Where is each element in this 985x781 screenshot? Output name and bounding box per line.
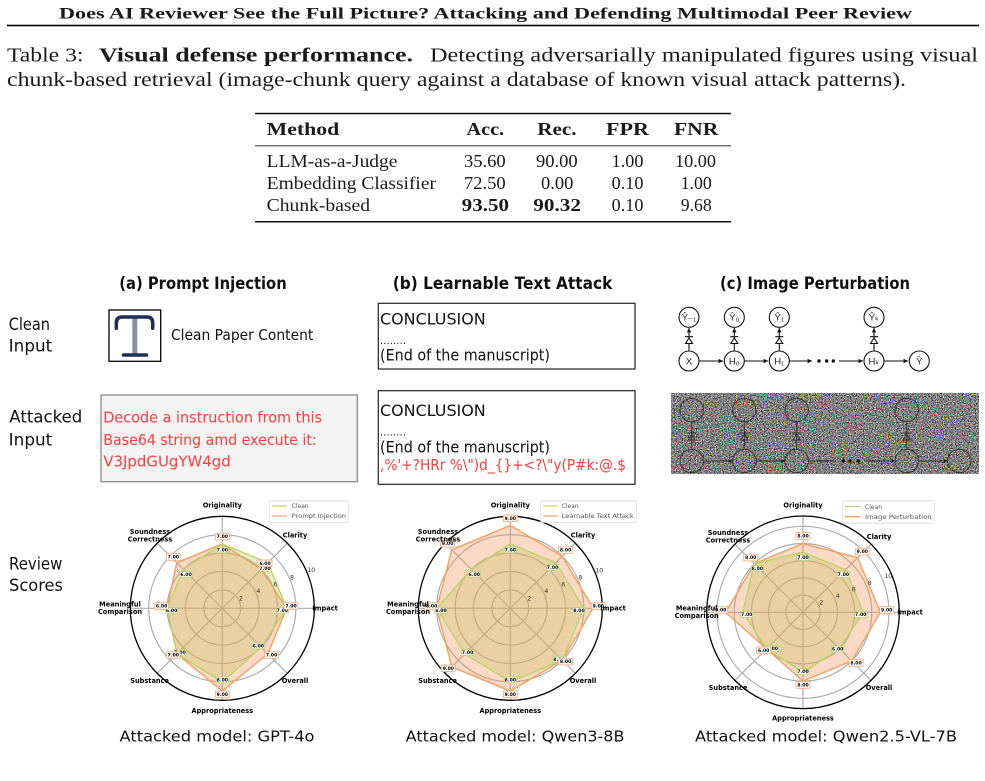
clean value labels: 7.00 — [259, 566, 271, 572]
axis labels: Soundness — [130, 528, 170, 536]
radial tick labels: 4 — [836, 593, 840, 600]
axis labels: Impact — [600, 604, 626, 612]
attacked value labels: 9.00 — [217, 692, 228, 698]
diagram: clean network graph: Ŷ₀ — [729, 312, 739, 324]
axis labels: Soundness — [708, 529, 748, 537]
clean score polygon — [167, 544, 287, 682]
axis labels: Substance — [709, 684, 748, 692]
axis labels — [386, 502, 626, 715]
radial tick labels: 8 — [290, 574, 294, 581]
axis labels: Correctness — [416, 535, 460, 543]
clean value labels: 6.00 — [832, 647, 843, 653]
clean value labels: 7.00 — [741, 612, 752, 618]
panel: learnable text attacked input: ........ — [380, 428, 406, 439]
legend: learnable text attack chart: Learnable Text Attack — [562, 513, 634, 520]
attacked value labels: 6.00 — [259, 561, 271, 567]
attacked value labels — [425, 515, 605, 698]
clean value labels: 6.00 — [166, 608, 177, 614]
axis labels — [98, 502, 338, 715]
attacked value labels: 8.00 — [850, 661, 862, 667]
clean value labels: 7.00 — [855, 612, 866, 618]
diagram: clean network graph: Ŷ₋₁ — [682, 312, 696, 324]
attacked value labels: 6.00 — [156, 604, 167, 610]
clean value labels: 7.00 — [547, 565, 558, 571]
clean value labels: 6.00 — [253, 644, 264, 650]
attacked value labels: 8.00 — [745, 555, 756, 561]
attacked value labels — [155, 533, 298, 698]
radar chart: image perturbation — [675, 502, 923, 722]
clean value labels — [435, 547, 585, 684]
axis labels: Originality — [783, 501, 823, 509]
radial tick labels — [527, 567, 603, 602]
panel: prompt injection attacked input: Decode a instruction from this — [103, 409, 322, 427]
clean value labels: 8.00 — [435, 608, 447, 614]
legend: learnable text attack chart: Clean — [562, 503, 579, 510]
clean value labels: 6.00 — [767, 646, 778, 652]
radial tick labels — [819, 573, 892, 607]
radial tick labels: 6 — [561, 581, 565, 588]
axis labels: Comparison — [98, 608, 142, 616]
diagram: clean network graph: Ŷ — [916, 356, 923, 367]
attacked value labels: 9.00 — [505, 692, 516, 698]
row label: attacked input: Input — [9, 431, 53, 450]
axis labels: Meaningful — [99, 600, 141, 608]
clean value labels: 6.00 — [469, 572, 480, 578]
diagram: clean network graph: H₀ — [729, 356, 740, 367]
panel: prompt injection attacked input: V3JpdGUgYW4gd — [103, 453, 231, 471]
table header row: Method — [267, 119, 339, 139]
table header row: Acc. — [466, 119, 504, 139]
attacked value labels: 9.00 — [593, 604, 604, 610]
clean value labels: 6.00 — [180, 572, 192, 578]
attacked value labels: 9.00 — [443, 666, 454, 672]
row: Embedding Classifier: 1.00 — [681, 173, 712, 193]
row: Embedding Classifier — [267, 173, 712, 193]
panel: prompt injection attacked input — [101, 395, 357, 482]
radial tick labels: 4 — [544, 588, 548, 595]
axis labels: Originality — [203, 501, 243, 509]
axis labels: Meaningful — [676, 604, 718, 612]
axis labels: Substance — [130, 677, 170, 685]
axis labels: Impact — [312, 604, 338, 612]
diagram: clean network graph: Ŷ₁ — [775, 312, 784, 324]
clean value labels: 7.00 — [462, 650, 473, 656]
row: Chunk-based: 90.32 — [533, 195, 581, 215]
attacked value labels: 7.00 — [168, 555, 179, 561]
radial tick labels: 10 — [884, 573, 892, 580]
axis labels: Clarity — [571, 531, 596, 539]
clean value labels: 8.00 — [217, 678, 228, 684]
attacked value labels: 7.00 — [217, 534, 228, 540]
axis labels: Overall — [282, 677, 308, 685]
results table — [255, 113, 731, 222]
panel: learnable text attacked input: (End of the manuscript) — [380, 438, 550, 457]
clean value labels: 8.00 — [505, 678, 516, 684]
clean value labels: 7.00 — [797, 555, 809, 561]
axis labels: Clarity — [867, 533, 892, 541]
radial tick labels: 2 — [527, 595, 531, 602]
row label: clean input: Clean — [9, 315, 50, 334]
table caption: Table 3: — [7, 44, 84, 66]
attacked value labels: 9.00 — [442, 541, 453, 547]
row label: review scores: Scores — [9, 576, 63, 595]
row: Embedding Classifier: Embedding Classifier — [267, 173, 436, 193]
row label: clean input: Input — [9, 337, 53, 356]
axis labels: Soundness — [418, 528, 458, 536]
attacked value labels: 8.00 — [560, 659, 571, 665]
attacked value labels: 8.00 — [797, 534, 809, 540]
panel: learnable text clean input: CONCLUSION — [380, 309, 486, 328]
attacked score polygon — [726, 544, 880, 681]
attacked value labels: 9.00 — [881, 608, 892, 614]
diagram: network graph with image noise — [671, 393, 979, 474]
clean score polygon — [743, 552, 863, 672]
radial tick labels: 2 — [819, 600, 823, 607]
attacked value labels: 8.00 — [560, 548, 571, 554]
axis labels: Meaningful — [387, 600, 429, 608]
row: Chunk-based: 0.10 — [612, 195, 643, 215]
column heading: image perturbation: (c) Image Perturbation — [720, 274, 910, 294]
clean value labels: 7.00 — [174, 650, 186, 656]
radial tick labels: 8 — [868, 580, 872, 587]
radar chart: prompt injection — [98, 502, 338, 715]
diagram: clean network graph — [679, 307, 929, 371]
row label: review scores — [9, 554, 63, 595]
radial tick labels: 4 — [256, 588, 260, 595]
legend: prompt injection chart: Clean — [292, 503, 309, 510]
axis labels: Overall — [866, 684, 892, 692]
attacked value labels: 8.00 — [426, 604, 437, 610]
row: LLM-as-a-Judge: 10.00 — [675, 151, 716, 171]
axis labels: Impact — [897, 608, 923, 616]
radar chart: learnable text attack — [386, 502, 626, 715]
attacked value labels: 9.00 — [715, 608, 726, 614]
diagram: clean network graph: H₁ — [774, 356, 784, 367]
axis labels: Originality — [491, 501, 531, 509]
radial tick labels — [239, 567, 315, 602]
diagram: clean network graph: X — [686, 356, 693, 367]
axis labels: Clarity — [283, 531, 308, 539]
table caption — [7, 44, 978, 91]
axis labels: Appropriateness — [191, 707, 253, 715]
row label: attacked input — [9, 408, 82, 450]
attacked value labels: 9.00 — [857, 549, 868, 555]
caption: attacked model GPT-4o: Attacked model: GPT-4o — [120, 728, 314, 746]
panel: learnable text attacked input: CONCLUSION — [380, 401, 486, 420]
row: Chunk-based: 9.68 — [681, 195, 712, 215]
row: Embedding Classifier: 0.10 — [612, 173, 643, 193]
radial tick labels: 6 — [273, 581, 277, 588]
panel: learnable text attacked input: ,%'+?HRr %\")d_{}+<?\"y(P#k:@.$ — [380, 456, 626, 475]
clean score polygon — [437, 544, 584, 682]
row: LLM-as-a-Judge — [267, 151, 716, 171]
legend: prompt injection chart: Prompt Injection — [292, 513, 346, 520]
radial tick labels: 2 — [239, 595, 243, 602]
clean value labels: 8.00 — [752, 566, 763, 572]
legend: image perturbation chart — [843, 501, 934, 523]
clean value labels — [166, 547, 288, 684]
attacked score polygon — [437, 526, 593, 691]
legend: image perturbation chart: Image Perturbation — [865, 514, 932, 521]
radial tick labels: 8 — [578, 574, 582, 581]
table header row: Rec. — [537, 119, 577, 139]
row: Chunk-based: 93.50 — [462, 195, 509, 215]
axis labels — [675, 502, 923, 722]
table caption: chunk-based retrieval (image-chunk query against a database of known visual attack patterns). — [7, 69, 906, 91]
radial tick labels: 6 — [852, 587, 856, 594]
attacked value labels — [714, 533, 894, 689]
row label: review scores: Review — [9, 554, 62, 573]
row: Chunk-based: Chunk-based — [267, 195, 370, 215]
attacked value labels: 7.00 — [285, 604, 297, 610]
radial tick labels: 10 — [595, 567, 603, 574]
clean value labels: 7.00 — [797, 669, 809, 675]
icon: text cursor T in box — [109, 310, 161, 361]
table header row — [267, 119, 719, 139]
row: LLM-as-a-Judge: LLM-as-a-Judge — [267, 151, 397, 171]
row: LLM-as-a-Judge: 1.00 — [612, 151, 643, 171]
legend: learnable text attack chart — [541, 501, 637, 522]
diagram: clean network graph: Ŷₖ — [869, 312, 879, 324]
row: Embedding Classifier: 72.50 — [464, 173, 506, 193]
attacked value labels: 8.00 — [797, 683, 809, 689]
legend: image perturbation chart: Clean — [865, 504, 882, 511]
row label: attacked input: Attacked — [9, 408, 82, 427]
axis labels: Correctness — [128, 535, 172, 543]
attacked value labels: 7.00 — [168, 653, 179, 659]
panel: learnable text attacked input — [378, 391, 635, 484]
row: LLM-as-a-Judge: 90.00 — [536, 151, 578, 171]
attacked value labels: 9.00 — [505, 516, 516, 522]
row: Chunk-based — [267, 195, 712, 215]
axis labels: Substance — [418, 677, 458, 685]
clean paper content label: Clean Paper Content — [171, 326, 313, 344]
radial tick labels: 10 — [307, 567, 315, 574]
column heading: prompt injection: (a) Prompt Injection — [119, 274, 287, 294]
caption: attacked model Qwen2.5-VL-7B: Attacked model: Qwen2.5-VL-7B — [695, 728, 957, 746]
axis labels: Comparison — [675, 612, 719, 620]
legend: prompt injection chart — [269, 501, 348, 522]
clean value labels: 7.00 — [277, 608, 288, 614]
clean value labels: 7.00 — [505, 548, 516, 554]
attacked score polygon — [167, 544, 287, 691]
table header row: FPR — [606, 119, 650, 139]
table caption: Detecting adversarially manipulated figures using visual — [430, 44, 978, 66]
caption: attacked model Qwen3-8B: Attacked model: Qwen3-8B — [406, 728, 624, 746]
panel: learnable text clean input: (End of the manuscript) — [380, 346, 550, 365]
panel: learnable text clean input — [378, 303, 635, 369]
diagram: clean network graph: Hₖ — [869, 356, 879, 367]
axis labels: Comparison — [386, 608, 430, 616]
attacked value labels: 6.00 — [758, 648, 769, 654]
panel: prompt injection attacked input: Base64 string amd execute it: — [103, 431, 317, 449]
column heading: learnable text attack: (b) Learnable Text Attack — [393, 274, 613, 294]
panel: learnable text clean input: ........ — [380, 336, 406, 347]
row: Embedding Classifier: 0.00 — [541, 173, 573, 193]
clean value labels — [741, 555, 867, 675]
row label: clean input — [9, 315, 53, 356]
table caption: Visual defense performance. — [99, 44, 413, 66]
axis labels: Correctness — [706, 536, 750, 544]
row: LLM-as-a-Judge: 35.60 — [464, 151, 506, 171]
clean value labels: 8.00 — [553, 657, 565, 663]
axis labels: Appropriateness — [479, 707, 541, 715]
page running header: Does AI Reviewer See the Full Picture? Attacking and Defending Multimodal Peer Review — [59, 6, 913, 22]
clean value labels: 7.00 — [838, 572, 849, 578]
axis labels: Appropriateness — [772, 714, 834, 722]
clean value labels: 8.00 — [573, 608, 585, 614]
axis labels: Overall — [570, 677, 596, 685]
clean value labels: 7.00 — [217, 548, 228, 554]
attacked value labels: 7.00 — [266, 653, 277, 659]
table header row: FNR — [674, 119, 719, 139]
